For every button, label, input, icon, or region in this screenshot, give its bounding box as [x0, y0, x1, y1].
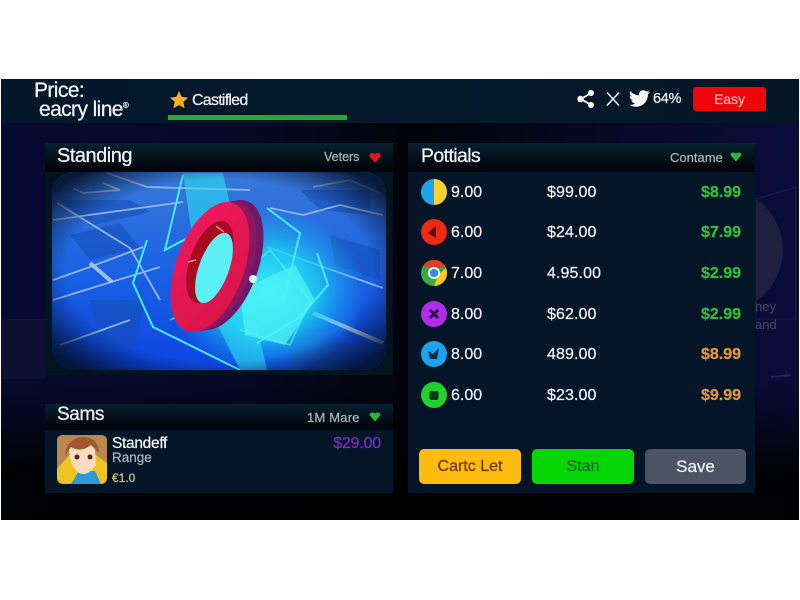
icon: purple disc	[421, 301, 447, 327]
row 2: 6.00	[451, 224, 482, 241]
pottials header	[408, 143, 755, 172]
button: cart let	[419, 449, 521, 484]
top bar	[1, 79, 799, 123]
title: Price:	[34, 79, 84, 102]
item rating: €1.0	[112, 471, 135, 485]
icon: blue disc	[421, 341, 447, 367]
row 5	[421, 341, 741, 367]
background text: ney	[755, 299, 776, 314]
panel: pottials	[408, 143, 755, 493]
row 6: $9.99	[701, 387, 741, 404]
standing heading: Standing	[57, 145, 132, 167]
row 6: 6.00	[451, 387, 482, 404]
panel: sams	[45, 404, 393, 493]
icon: chrome disc	[421, 260, 447, 286]
row 3	[421, 260, 741, 286]
title: eacry line®	[39, 98, 128, 121]
row 6	[421, 382, 741, 408]
panel: standing	[45, 143, 393, 375]
icon: star	[170, 91, 188, 108]
row 1: $99.00	[547, 184, 597, 201]
row 2	[421, 219, 741, 245]
background text	[755, 299, 777, 332]
icon: blue yellow disc	[421, 179, 447, 205]
icon: green heart	[370, 412, 380, 422]
icon: green heart	[730, 152, 742, 162]
row 5: 489.00	[547, 346, 597, 363]
button: stan: Stan	[567, 458, 599, 475]
button: save	[645, 449, 746, 484]
sams heading: Sams	[57, 404, 104, 425]
row 2: $24.00	[547, 224, 597, 241]
sams header	[45, 404, 393, 430]
button: cart let: Cartc Let	[438, 458, 502, 475]
sams filter: 1M Mare	[307, 410, 360, 425]
row 4: $2.99	[701, 306, 741, 323]
button: save: Save	[676, 457, 715, 476]
row 4: 8.00	[451, 306, 482, 323]
row 3: 7.00	[451, 265, 482, 282]
button: easy	[693, 87, 766, 111]
row 4	[421, 301, 741, 327]
illustration: red ring on glowing blue grid	[52, 172, 386, 370]
item price: $29.00	[333, 435, 381, 452]
row 1	[421, 179, 741, 205]
row 1: $8.99	[701, 184, 741, 201]
icon: green disc	[421, 382, 447, 408]
row 6: $23.00	[547, 387, 597, 404]
progress bar	[168, 115, 347, 120]
app background	[1, 79, 799, 520]
row 3: 4.95.00	[547, 265, 601, 282]
icon: share	[577, 90, 594, 108]
item name: Standeff	[112, 435, 167, 452]
icon: close	[606, 92, 620, 106]
icon: red disc	[421, 219, 447, 245]
pottials heading: Pottials	[421, 145, 480, 167]
row 1: 9.00	[451, 184, 482, 201]
background text: and	[755, 317, 777, 332]
item subtitle: Range	[112, 450, 152, 465]
button: easy: Easy	[714, 91, 745, 107]
row 5: 8.00	[451, 346, 482, 363]
pottials filter: Contame	[670, 150, 723, 165]
row 3: $2.99	[701, 265, 741, 282]
row 4: $62.00	[547, 306, 597, 323]
button: stan	[532, 449, 634, 484]
status label: Castifled	[192, 92, 248, 109]
title	[34, 79, 129, 121]
icon: red heart	[369, 152, 381, 162]
percentage: 64%	[653, 91, 681, 107]
avatar	[57, 435, 107, 484]
row 2: $7.99	[701, 224, 741, 241]
standing filter: Veters	[324, 150, 359, 164]
row 5: $8.99	[701, 346, 741, 363]
icon: bird	[630, 90, 650, 107]
standing header	[45, 143, 393, 172]
